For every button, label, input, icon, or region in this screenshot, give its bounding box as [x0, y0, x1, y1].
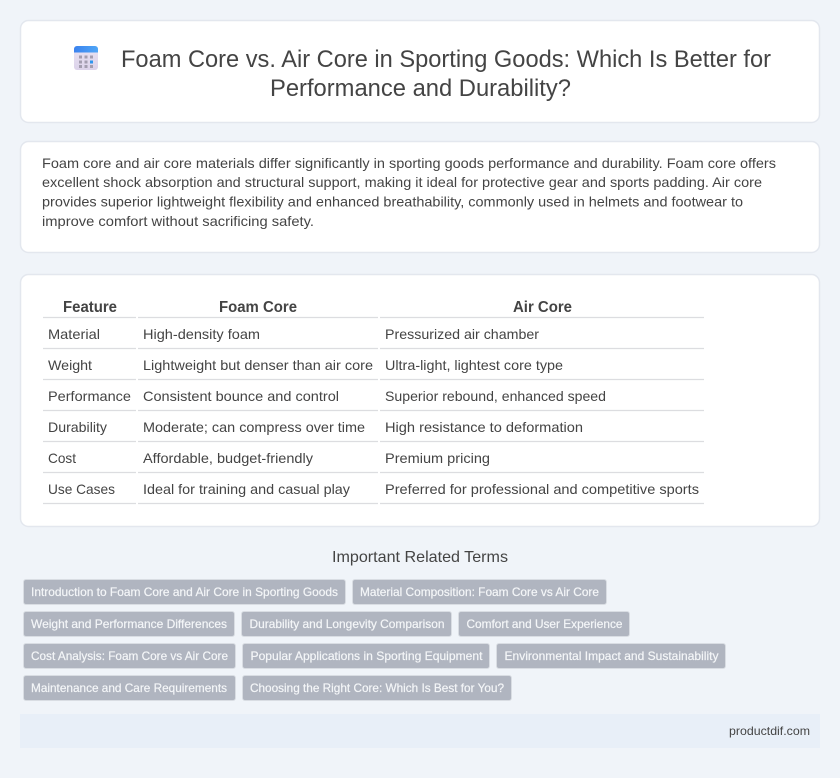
panel: header: [20, 20, 820, 122]
tag: [242, 676, 512, 700]
table row: cost: Premium pricing: [385, 450, 490, 466]
table row: durability: [48, 419, 583, 435]
tag: [496, 644, 726, 668]
table row: cost: [48, 450, 490, 466]
table row: performance: Superior rebound, enhanced speed: [385, 388, 606, 404]
table row: weight: Ultra-light, lightest core type: [385, 357, 563, 373]
table row: performance: [48, 388, 606, 404]
tag: [24, 580, 346, 604]
tag: [24, 676, 236, 700]
table row: use cases: Preferred for professional and competitive sports: [385, 481, 699, 497]
tag: [242, 612, 452, 636]
tag: Material Composition: Foam Core vs Air Core: [360, 585, 599, 599]
tag: Durability and Longevity Comparison: [250, 617, 444, 631]
table row: material: [48, 326, 539, 342]
table row: cost: Cost: [48, 450, 76, 466]
title: Foam Core vs. Air Core in Sporting Goods: Which Is Better for: [121, 46, 771, 73]
panel: comparison table: [20, 274, 820, 526]
title: Performance and Durability?: [270, 75, 571, 102]
tag: Comfort and User Experience: [466, 617, 623, 631]
table row: durability: Durability: [48, 419, 107, 435]
table row: weight: [48, 357, 563, 373]
table header: Air Core: [513, 299, 572, 316]
tag: [458, 612, 630, 636]
table row: durability: High resistance to deformation: [385, 419, 583, 435]
table row: use cases: Ideal for training and casual play: [143, 481, 350, 497]
icon: calendar: [74, 46, 98, 70]
table row: cost: Affordable, budget-friendly: [143, 450, 313, 466]
table row: durability: Moderate; can compress over time: [143, 419, 365, 435]
table row: material: High-density foam: [143, 326, 260, 342]
footer: [20, 714, 820, 748]
tag: Popular Applications in Sporting Equipment: [250, 649, 483, 663]
table row: material: Material: [48, 326, 100, 342]
panel: introduction: [20, 142, 820, 252]
table row: use cases: [48, 481, 699, 497]
tag: Introduction to Foam Core and Air Core in Sporting Goods: [31, 585, 338, 599]
table header: Foam Core: [219, 299, 297, 316]
tag: Weight and Performance Differences: [31, 617, 227, 631]
tag: [24, 612, 234, 636]
tag: Environmental Impact and Sustainability: [504, 649, 718, 663]
text block: introduction: [42, 155, 776, 229]
table row: use cases: Use Cases: [48, 481, 115, 497]
heading: important related terms: Important Related Terms: [332, 549, 508, 566]
table header: Feature: [63, 299, 117, 316]
title: [121, 46, 771, 102]
text block: introduction: excellent shock absorption and structural support, making it ideal for protective gear and sports padding. Air core: [42, 174, 762, 190]
tag: [242, 644, 490, 668]
footer: productdif.com: [729, 724, 810, 738]
text block: introduction: Foam core and air core materials differ significantly in sporting goods performance and durability. Foam core offers: [42, 155, 776, 171]
text block: introduction: provides superior lightweight flexibility and enhanced breathability, commonly used in helmets and footwear to: [42, 194, 743, 210]
tag list: [24, 580, 726, 700]
table row: weight: Weight: [48, 357, 92, 373]
table row: performance: Performance: [48, 388, 131, 404]
table row: weight: Lightweight but denser than air core: [143, 357, 373, 373]
tag: [352, 580, 606, 604]
tag: Maintenance and Care Requirements: [31, 681, 227, 695]
table header: [63, 299, 572, 316]
table row: material: Pressurized air chamber: [385, 326, 539, 342]
table row: performance: Consistent bounce and control: [143, 388, 339, 404]
tag: Cost Analysis: Foam Core vs Air Core: [31, 649, 228, 663]
text block: introduction: improve comfort without sacrificing safety.: [42, 213, 314, 229]
tag: [24, 644, 236, 668]
tag: Choosing the Right Core: Which Is Best for You?: [250, 681, 504, 695]
